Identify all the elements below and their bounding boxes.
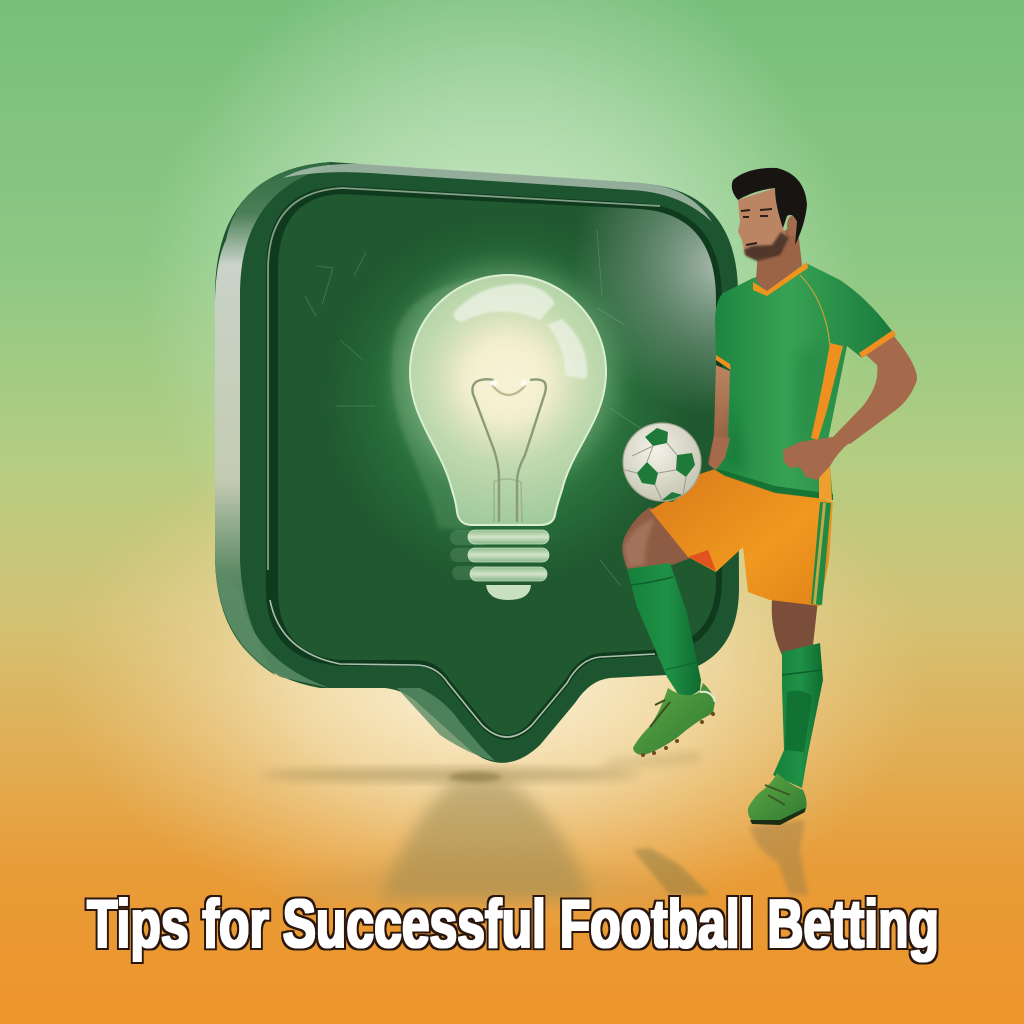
raised thigh xyxy=(622,507,712,570)
right hand on hip xyxy=(783,437,850,480)
collar xyxy=(753,262,808,296)
jersey fold shading xyxy=(725,400,745,470)
eyes and mouth xyxy=(741,209,772,245)
lower rim highlight line xyxy=(270,600,655,737)
jersey xyxy=(712,264,896,500)
sleeve cuff right xyxy=(859,330,896,358)
bulb glass xyxy=(410,275,606,525)
tail side shading xyxy=(397,688,495,761)
lightbulb xyxy=(392,265,617,600)
face xyxy=(738,188,788,260)
standing sock xyxy=(773,643,823,788)
raised sock xyxy=(627,563,701,697)
raised boot xyxy=(633,683,715,757)
ear xyxy=(787,216,797,236)
standing thigh xyxy=(772,600,818,655)
filament sparks xyxy=(491,380,527,386)
upper groove highlight line xyxy=(268,188,660,570)
sleeve cuff left xyxy=(716,355,731,370)
right glass reflection xyxy=(547,319,587,379)
panel sheen and glow xyxy=(304,206,716,585)
neck xyxy=(756,222,802,293)
bulb screw base xyxy=(468,530,549,581)
filament xyxy=(472,379,546,522)
bulb ghost echo xyxy=(392,277,500,530)
bulb outer glow xyxy=(397,265,617,485)
football xyxy=(623,423,701,502)
beard xyxy=(744,232,789,261)
standing boot xyxy=(748,773,807,825)
rim top highlight xyxy=(283,164,712,222)
panel face xyxy=(278,194,716,735)
rim dark inner groove xyxy=(266,186,722,740)
speech bubble with lightbulb xyxy=(215,162,739,763)
raised knee highlight xyxy=(624,518,655,568)
bulb tip xyxy=(486,585,531,600)
bulb screw base ghost xyxy=(450,530,492,580)
shorts xyxy=(650,468,833,606)
football player xyxy=(622,168,917,825)
left arm xyxy=(708,365,732,470)
upper right arm xyxy=(830,335,917,444)
floor shadow and bulb reflection xyxy=(260,752,808,900)
left hand on hip xyxy=(709,436,730,470)
raglan seam xyxy=(800,275,830,345)
speech bubble outer rim xyxy=(215,162,739,763)
jersey orange side panel xyxy=(811,343,843,440)
inner warm core xyxy=(459,332,555,428)
head xyxy=(732,168,807,261)
rim left metallic highlight xyxy=(215,162,330,675)
hair xyxy=(732,168,807,245)
top glass reflection xyxy=(454,284,555,322)
lower left rim shading xyxy=(216,570,330,688)
